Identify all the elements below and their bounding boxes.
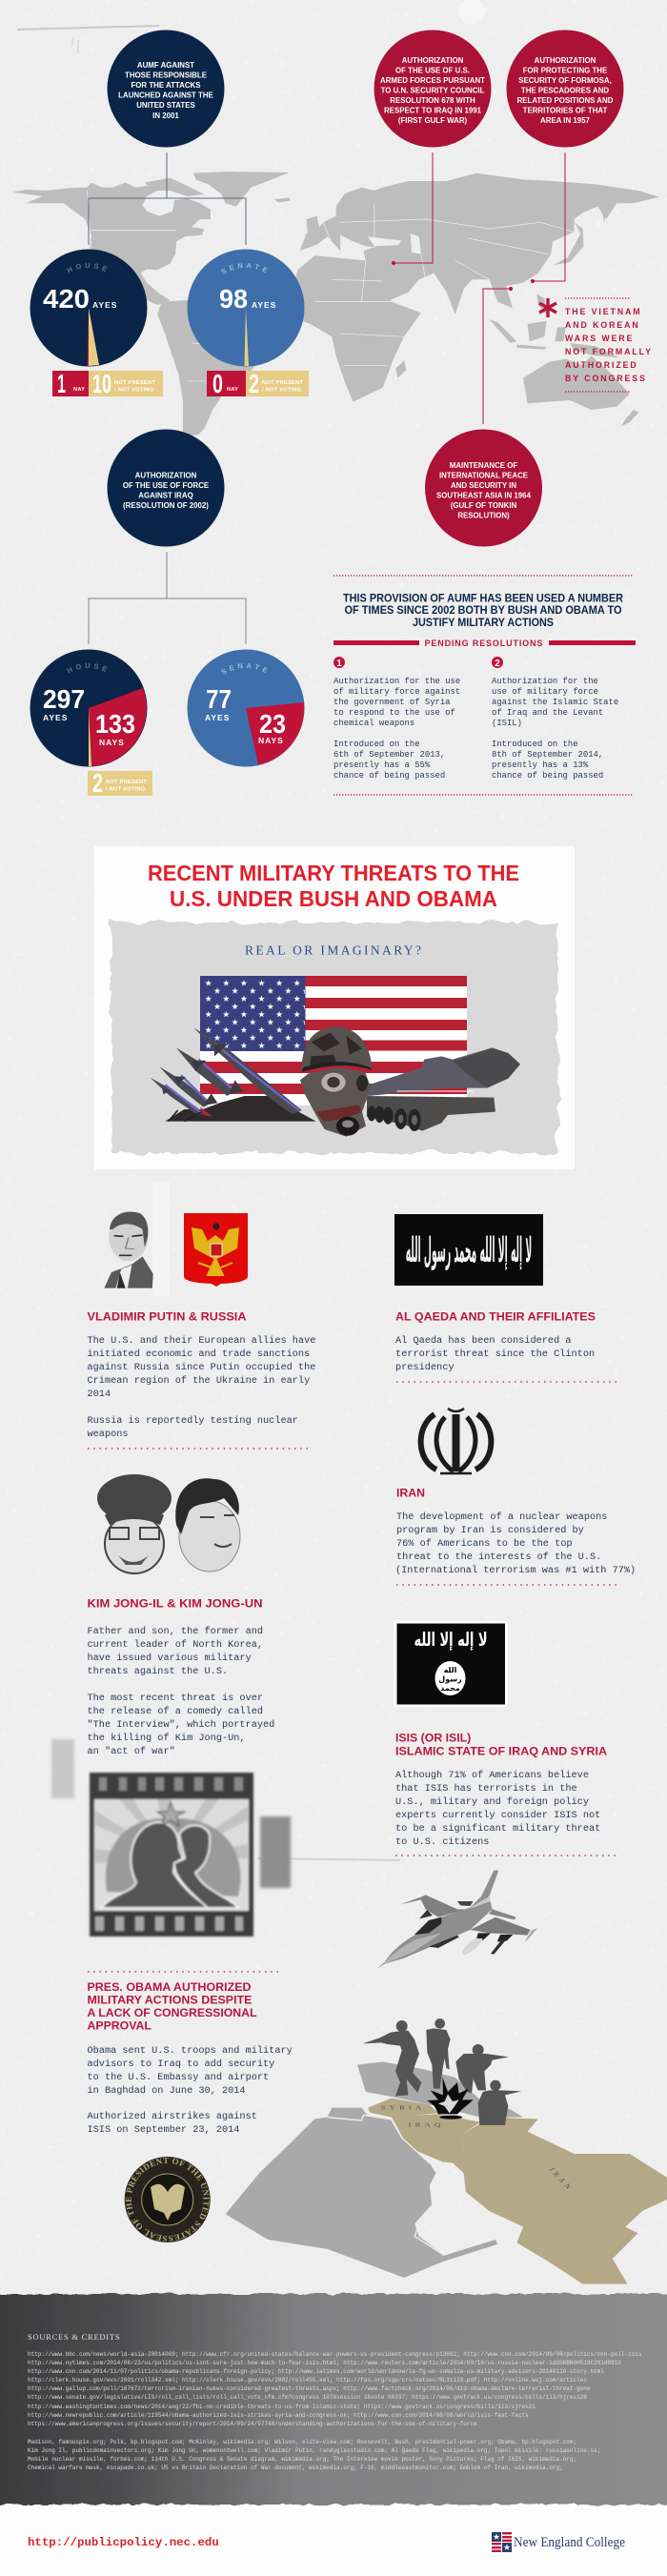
icon: ISIS flag: رسول	[438, 1675, 462, 1683]
text: Putin: against Russia since Putin occupied the	[88, 1362, 315, 1373]
icon: F-16 jet	[376, 1871, 537, 1969]
callout: Vietnam and Korean wars	[539, 298, 653, 392]
banner: pending resolutions	[334, 639, 636, 648]
text: Iran: threat to the interests of the U.S.	[396, 1552, 601, 1563]
text: ISIS: that ISIS has terrorists in the	[395, 1783, 577, 1795]
logo: New England College	[492, 2532, 625, 2552]
resolution 1: presently has a 55%	[334, 761, 431, 770]
text: Kims: threats against the U.S.	[88, 1666, 228, 1677]
pie: 2001 house vote: HOUSE	[67, 263, 108, 273]
text: Obama: to the U.S. Embassy and airport	[88, 2072, 269, 2083]
pie: 2002 senate vote: 77	[206, 684, 232, 714]
pie: 2002 house vote: AYES	[43, 713, 68, 722]
vote box: 2001 house nays and not voting: NAY	[73, 387, 85, 393]
banner: pending resolutions: PENDING RESOLUTIONS	[425, 639, 545, 648]
icon: The Interview film poster	[90, 1773, 253, 1937]
text: Kims: Father and son, the former and	[88, 1626, 263, 1637]
resolution 2: (ISIL)	[492, 719, 522, 728]
circle: Formosa authorization: THE PESCADORES AND	[521, 86, 609, 95]
pie: 2002 senate vote: 23	[259, 709, 286, 739]
resolution 2: chance of being passed	[492, 771, 603, 781]
circle: Formosa authorization: RELATED POSITIONS AND	[517, 96, 614, 105]
callout: Vietnam and Korean wars: AUTHORIZED	[565, 360, 638, 370]
resolution 1: 1	[336, 659, 342, 669]
pie: 2001 house vote	[30, 250, 147, 366]
pie: 2001 senate vote	[187, 250, 305, 366]
circle: Gulf of Tonkin resolution: INTERNATIONAL PEACE	[439, 471, 528, 480]
text: source links: http://www.senate.gov/legislative/LIS/roll_call_lists/roll_call_vote_cfm.cfm?congress 107&session 2&vote 00237; https://www.govtrack.us/congress/bills/113/hjres128	[28, 2394, 587, 2401]
title: U.S. UNDER BUSH AND OBAMA	[170, 886, 497, 911]
circle: Iraq 2002 authorization: AGAINST IRAQ	[138, 492, 193, 499]
resolution 1: to respond to the use of	[334, 708, 455, 718]
map: Middle East	[226, 2061, 667, 2284]
vote box: 2002 house not voting: 2	[92, 768, 103, 798]
white footer background	[0, 2478, 667, 2576]
text: image credits: Kim Jong Il, publicdomainvectors.org; Kim Jong Un, womenontwell.com; Vladimir Putin, randyglasstudio.com; Al Qaeda Flag, wikipedia.org; Topol missile: russiaonline.ss;	[28, 2447, 600, 2454]
circle: Formosa authorization: SECURITY OF FORMOSA,	[518, 76, 612, 85]
text: Putin: Russia is reportedly testing nuclear	[88, 1415, 298, 1427]
circle: Iraq 2002 authorization	[107, 429, 225, 547]
connector: Gulf War to Iraq	[392, 152, 433, 265]
vote box: 2001 senate nays and not voting: 2	[249, 369, 259, 398]
heading: sources: SOURCES & CREDITS	[28, 2332, 120, 2342]
circle: Gulf War authorization	[374, 30, 492, 147]
text: source links: http://www.washingtontimes.com/news/2014/aug/22/fbi-no-credible-threats-to-us-from-islamic-state; https://www.govtrack.us/congress/bills/113/sjres21	[28, 2404, 536, 2410]
resolution 2	[492, 657, 618, 781]
pie: 2002 house vote: HOUSE	[67, 663, 108, 673]
heading: ISIS: ISIS (OR ISIL)	[395, 1731, 471, 1744]
circle: Gulf of Tonkin resolution: RESOLUTION)	[457, 511, 510, 520]
text: source links: http://clerk.house.gov/evs/2001/roll342.xml; http://clerk.house.gov/evs/2002/roll455.xml; http://fas.org/sgp/crs/natsec/RL31133.pdf; http://online.wsj.com/articles	[28, 2377, 587, 2383]
text: Kims: have issued various military	[88, 1653, 252, 1664]
circle: Iraq 2002 authorization: (RESOLUTION OF 2002)	[123, 501, 209, 510]
resolution 2: of Iraq and the Levant	[492, 708, 603, 718]
text: Al Qaeda: terrorist threat since the Clinton	[395, 1349, 595, 1360]
resolution 2: presently has a 13%	[492, 761, 589, 770]
pie: 2002 house vote: 297	[43, 684, 85, 714]
text: ISIS: U.S., military and foreign policy	[395, 1796, 589, 1808]
blurred censor bars	[51, 1739, 291, 1888]
heading: Iran: IRAN	[396, 1487, 425, 1500]
world map	[12, 172, 659, 436]
circle: Gulf War authorization: AUTHORIZATION	[402, 56, 464, 65]
circle: Gulf War authorization: OF THE USE OF U.S.	[395, 67, 470, 74]
icon: Russian coat of arms	[184, 1213, 248, 1287]
circle: Formosa authorization: AUTHORIZATION	[535, 56, 596, 65]
panel: recent military threats	[94, 846, 575, 1169]
vote box: 2001 senate nays and not voting: NOT PRESENT	[262, 380, 303, 386]
circle: Formosa authorization	[507, 30, 623, 147]
pie: 2002 senate vote: SENATE	[221, 663, 268, 675]
heading: Obama: A LACK OF CONGRESSIONAL	[88, 2006, 257, 2019]
title: RECENT MILITARY THREATS TO THE	[148, 861, 519, 885]
resolution 1: chemical weapons	[334, 719, 414, 728]
resolution 1: 6th of September 2013,	[334, 750, 445, 760]
connector: Iraq resolution to house and senate	[89, 552, 246, 644]
connector: Gulf of Tonkin to Vietnam	[483, 287, 513, 424]
text: Obama: ISIS on September 23, 2014	[88, 2124, 239, 2136]
callout: Vietnam and Korean wars: WARS WERE	[565, 334, 634, 343]
pie: 2001 senate vote: 98	[219, 284, 248, 314]
text: Obama: Obama sent U.S. troops and military	[88, 2045, 293, 2057]
text: Putin: weapons	[88, 1429, 129, 1440]
connector: AUMF 2001 to house and senate	[89, 152, 246, 245]
circle: Formosa authorization: AREA IN 1957	[540, 116, 591, 125]
circle: Formosa authorization: FOR PROTECTING THE	[523, 67, 607, 74]
icon: Al Qaeda flag	[394, 1214, 543, 1286]
circle: Gulf War authorization: RESOLUTION 678 WITH	[390, 96, 475, 105]
pie: 2002 house vote	[30, 650, 147, 766]
resolution 2: Authorization for the	[492, 677, 598, 686]
text: Obama: Authorized airstrikes against	[88, 2111, 257, 2122]
vote box: 2002 house not voting	[88, 768, 152, 798]
connector: Formosa to Taiwan	[531, 152, 565, 283]
circle: AUMF 2001	[107, 30, 225, 147]
text: Kims: current leader of North Korea,	[88, 1639, 263, 1651]
circle: Gulf War authorization: ARMED FORCES PURSUANT	[380, 76, 485, 85]
heading: AUMF provision: OF TIMES SINCE 2002 BOTH BY BUSH AND OBAMA TO	[345, 603, 621, 617]
resolution 1	[334, 657, 460, 781]
resolution 1: of military force against	[334, 687, 460, 697]
resolution 1: the government of Syria	[334, 698, 451, 707]
panel: sources and credits	[0, 2294, 667, 2505]
text: source links: http://www.gallup.com/poll/167672/terrorism-iranian-nukes-considered-greatest-threats.aspx; http://www.factcheck.org/2014/06/did-obama-declare-terrorist-threat-gone	[28, 2385, 591, 2392]
heading: Kims: KIM JONG-IL & KIM JONG-UN	[88, 1597, 263, 1611]
circle: AUMF 2001: UNITED STATES	[136, 101, 195, 110]
text: ISIS: Although 71% of Americans believe	[395, 1770, 589, 1781]
pie: 2002 house vote: 133	[95, 709, 135, 739]
circle: Formosa authorization: TERRITORIES OF THAT	[523, 107, 608, 114]
text: Kims: The most recent threat is over	[88, 1693, 263, 1704]
text: Obama: in Baghdad on June 30, 2014	[88, 2085, 246, 2097]
heading: Putin: VLADIMIR PUTIN & RUSSIA	[88, 1309, 247, 1323]
circle: AUMF 2001: IN 2001	[152, 112, 179, 120]
text: ISIS: experts currently consider ISIS not	[395, 1810, 600, 1821]
callout: Vietnam and Korean wars: BY CONGRESS	[565, 374, 647, 383]
circle: Gulf War authorization: TO U.N. SECURITY COUNCIL	[381, 86, 485, 95]
text: image credits: Madison, famouspix.org; Polk, bp.blogspot.com; McKinley, wikimedia.org; Wilson, elite-view.com; Roosevelt, Bush, presidential-power.org; Obama, bp.blogspot.com;	[28, 2439, 576, 2445]
pie: 2002 senate vote	[187, 650, 305, 766]
callout: Vietnam and Korean wars: THE VIETNAM	[565, 307, 642, 316]
circle: Iraq 2002 authorization: AUTHORIZATION	[135, 471, 197, 480]
text: ISIS: to U.S. citizens	[395, 1836, 489, 1848]
circle: Gulf War authorization: RESPECT TO IRAQ IN 1991	[384, 107, 482, 114]
pie: 2002 house vote: NAYS	[99, 738, 125, 747]
icon: emblem of Iran	[421, 1409, 491, 1473]
vote box: 2001 senate nays and not voting: / NOT VOTING	[262, 387, 302, 393]
text: Iran: program by Iran is considered by	[396, 1525, 584, 1536]
icon: mobile nuclear missile	[367, 1047, 520, 1131]
text: Putin: 2014	[88, 1389, 111, 1400]
icon: Putin portrait	[104, 1211, 153, 1288]
circle: Gulf of Tonkin resolution: AND SECURITY IN	[451, 481, 516, 490]
callout: Vietnam and Korean wars: NOT FORMALLY	[565, 347, 653, 356]
circle: Gulf War authorization: (FIRST GULF WAR)	[398, 116, 468, 125]
heading: Obama: MILITARY ACTIONS DESPITE	[88, 1994, 252, 2007]
callout: Vietnam and Korean wars: AND KOREAN	[565, 320, 640, 330]
vote box: 2002 house not voting: NOT PRESENT	[106, 780, 147, 785]
resolution 2: 8th of September 2014,	[492, 750, 603, 760]
vote box: 2002 house not voting: / NOT VOTING	[106, 787, 146, 793]
text: Iran: (International terrorism was #1 with 77%)	[395, 1565, 636, 1576]
heading: ISIS: ISLAMIC STATE OF IRAQ AND SYRIA	[395, 1744, 607, 1757]
heading: Obama: APPROVAL	[88, 2018, 152, 2032]
circle: Gulf of Tonkin resolution: MAINTENANCE OF	[450, 461, 517, 470]
pie: 2002 senate vote: NAYS	[258, 736, 284, 745]
icon: ISIS flag: محمد	[440, 1684, 460, 1693]
circle: Gulf of Tonkin resolution	[425, 429, 542, 547]
pie: 2001 house vote: 420	[43, 284, 90, 314]
text: Putin: The U.S. and their European allies have	[88, 1335, 315, 1347]
icon: Al Qaeda flag: لا إله إلا الله محمد رسول الله	[406, 1230, 532, 1271]
vote box: 2001 senate nays and not voting: NAY	[227, 387, 238, 393]
icon: soldiers and explosion	[363, 2018, 521, 2125]
heading: Al Qaeda: AL QAEDA AND THEIR AFFILIATES	[395, 1309, 596, 1323]
text: Kims: an "act of war"	[88, 1746, 175, 1757]
vote box: 2001 house nays and not voting: NOT PRESENT	[114, 380, 155, 386]
map: Middle East: SYRIA	[381, 2103, 425, 2111]
icon: ISIS flag: الله	[444, 1666, 457, 1674]
text: source links: http://www.newrepublic.com/article/119544/obama-authorized-isis-strikes-syria-and-congress-ok; http://www.cnn.com/2014/08/08/world/isis-fast-facts	[28, 2412, 529, 2419]
vote box: 2001 house nays and not voting: / NOT VOTING	[114, 387, 154, 393]
text: source links: https://www.americanprogress.org/issues/security/report/2014/09/24/97748/understanding-authorizations-for-the-use-of-military-force	[28, 2421, 477, 2427]
icon: ISIS flag: لا إله إلا الله	[414, 1629, 488, 1651]
text: image credits: Mobile nuclear missile, forbes.com; 114th U.S. Congress & Senate diagram, wikimedia.org; The Interview movie poster, Sony Pictures; Flag of ISIS, wikimedia.org;	[28, 2456, 576, 2463]
icon: missiles on launcher	[150, 1027, 316, 1122]
text: Iran: 76% of Americans to be the top	[396, 1538, 573, 1550]
heading: Obama: PRES. OBAMA AUTHORIZED	[88, 1980, 252, 1994]
text: Iran: The development of a nuclear weapons	[396, 1511, 607, 1523]
pie: 2001 senate vote: SENATE	[221, 263, 268, 274]
vote box: 2001 senate nays and not voting: 0	[212, 369, 223, 398]
vote box: 2001 house nays and not voting: 1	[57, 369, 66, 398]
text: source links: http://www.nytimes.com/2014/08/23/us/politics/us-isnt-sure-just-how-much-to-fear-isis.html; http://www.reuters.com/article/2014/09/10/us-russia-nuclear-idUSKBN0H519C20140910	[28, 2360, 621, 2366]
text: Putin: Crimean region of the Ukraine in early	[88, 1375, 310, 1387]
circle: Iraq 2002 authorization: OF THE USE OF FORCE	[123, 481, 209, 490]
text: source links: http://www.cnn.com/2014/11/07/politics/obama-republicans-foreign-policy; http://www.latimes.com/world/worldnow/la-fg-wn-somalia-us-military-advisers-20140110-story.html	[28, 2368, 604, 2375]
pie: 2001 house vote: AYES	[92, 300, 117, 310]
icon: presidential seal: SEAL OF THE PRESIDENT OF THE UNITED STATES	[126, 2158, 210, 2241]
icon: soldier with gas mask	[300, 1026, 372, 1137]
circle: AUMF 2001: AUMF AGAINST	[137, 61, 194, 70]
text: Obama: advisors to Iraq to add security	[88, 2059, 274, 2070]
panel: pending resolutions	[334, 576, 636, 795]
circle: Gulf of Tonkin resolution: SOUTHEAST ASIA IN 1964	[436, 492, 532, 499]
text: image credits: Chemical warfare mask, escapade.co.uk; US vs Britain Declaration of War document, wikimedia.org; F-16, middleeastmonitor.com; Emblem of Iran, wikimedia.org;	[28, 2464, 563, 2471]
text: source links: http://www.bbc.com/news/world-asia-28014069; http://www.cfr.org/united-states/balance-war-powers-us-president-congress/p13092; http://www.cnn.com/2014/09/08/politics/cnn-poll-isis	[28, 2351, 642, 2358]
text: Al Qaeda: Al Qaeda has been considered a	[395, 1335, 572, 1347]
resolution 1: chance of being passed	[334, 771, 445, 781]
pie: 2002 senate vote: AYES	[205, 713, 230, 722]
resolution 2: 2	[495, 659, 500, 669]
text: Putin: initiated economic and trade sanctions	[88, 1349, 310, 1360]
footer url: http://publicpolicy.nec.edu	[28, 2536, 219, 2549]
icon: ISIS flag	[394, 1621, 508, 1707]
subtitle: REAL OR IMAGINARY?	[245, 943, 421, 957]
map: Middle East: IRAN	[547, 2166, 576, 2193]
logo: New England College: New England College	[514, 2535, 625, 2550]
map: Middle East: IRAQ	[409, 2121, 444, 2128]
resolution 2: use of military force	[492, 687, 598, 697]
text: Al Qaeda: presidency	[395, 1362, 455, 1373]
icon: Kim Jong-il and Kim Jong-un	[97, 1474, 240, 1573]
text: Kims: the release of a comedy called	[88, 1706, 263, 1717]
circle: AUMF 2001: THOSE RESPONSIBLE	[125, 71, 207, 80]
circle: AUMF 2001: FOR THE ATTACKS	[131, 81, 201, 90]
heading: AUMF provision: JUSTIFY MILITARY ACTIONS	[413, 616, 554, 629]
resolution 2: against the Islamic State	[492, 698, 618, 707]
resolution 1: Authorization for the use	[334, 677, 460, 686]
icon: US flag	[200, 976, 467, 1105]
vote box: 2001 house nays and not voting	[52, 369, 163, 398]
text: Kims: the killing of Kim Jong-Un,	[88, 1733, 246, 1744]
resolution 2: Introduced on the	[492, 740, 578, 749]
circle: AUMF 2001: LAUNCHED AGAINST THE	[118, 91, 213, 99]
text: ISIS: to be a significant military threat	[395, 1823, 600, 1835]
pie: 2001 senate vote: AYES	[252, 300, 276, 310]
vote box: 2001 house nays and not voting: 10	[92, 369, 111, 398]
resolution 1: Introduced on the	[334, 740, 420, 749]
circle: Gulf of Tonkin resolution: (GULF OF TONKIN	[451, 501, 517, 510]
heading: AUMF provision: THIS PROVISION OF AUMF HAS BEEN USED A NUMBER	[343, 591, 623, 604]
vote box: 2001 senate nays and not voting	[207, 369, 309, 398]
text: Kims: "The Interview", which portrayed	[88, 1719, 274, 1731]
